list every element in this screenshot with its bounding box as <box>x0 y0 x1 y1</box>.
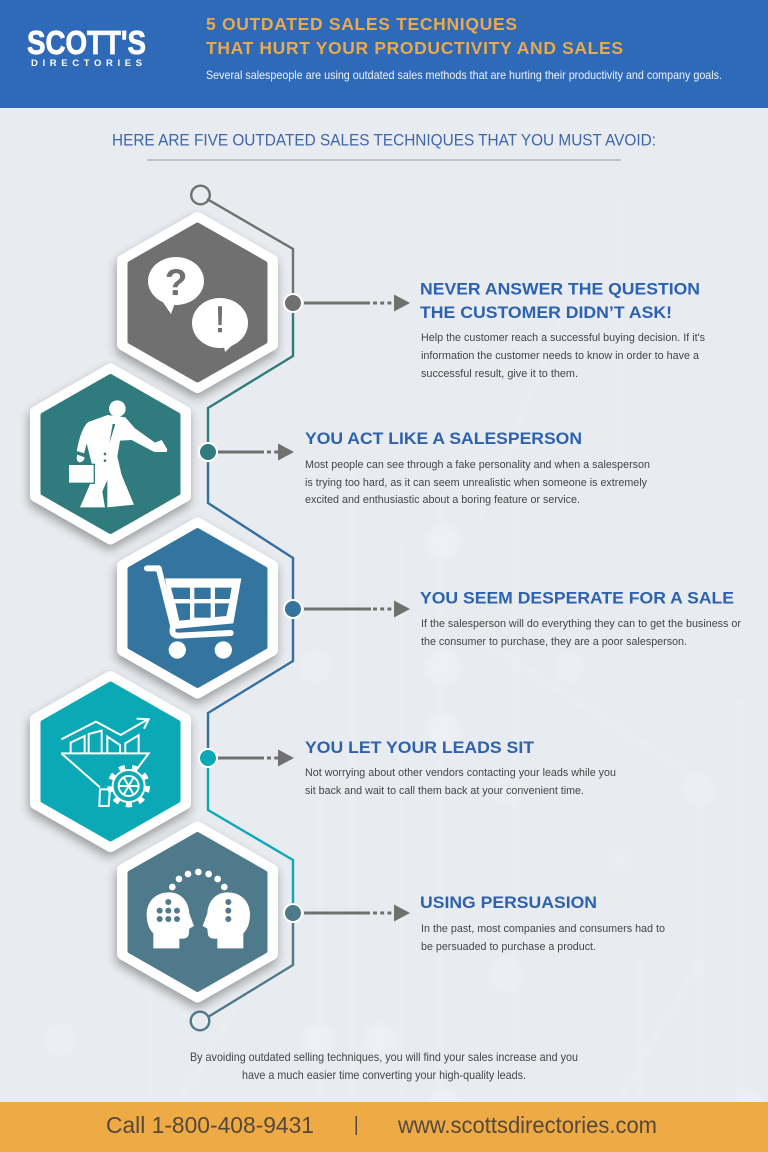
technique 3 text: If the salesperson will do everything they can to get the business or <box>421 618 741 630</box>
closing statement: By avoiding outdated selling techniques, you will find your sales increase and you <box>190 1050 578 1064</box>
technique 4 text: YOU LET YOUR LEADS SIT <box>305 738 535 757</box>
hexagon 5: two heads <box>122 828 272 1002</box>
icon: businessman <box>68 400 167 507</box>
hexagon 3: shopping cart <box>122 524 272 698</box>
node 4 with arrow <box>199 749 294 767</box>
node 3 with arrow <box>284 600 410 618</box>
technique 5 text <box>420 893 665 953</box>
technique 5 text: In the past, most companies and consumers had to <box>421 923 665 935</box>
arrow 5 <box>304 904 410 922</box>
subheading: HERE ARE FIVE OUTDATED SALES TECHNIQUES THAT YOU MUST AVOID: <box>112 130 656 150</box>
technique 1 text: NEVER ANSWER THE QUESTION <box>420 280 700 298</box>
technique 2 text: YOU ACT LIKE A SALESPERSON <box>305 429 582 448</box>
technique 5 text: be persuaded to purchase a product. <box>421 941 596 953</box>
arrow 2 <box>218 444 294 460</box>
title: 5 OUTDATED SALES TECHNIQUES <box>206 14 517 34</box>
technique 1 text <box>420 280 705 380</box>
separator <box>356 1116 357 1135</box>
icon: funnel with gear <box>61 719 149 806</box>
website: www.scottsdirectories.com <box>397 1112 657 1138</box>
end ring <box>191 1012 209 1030</box>
icon: speech bubbles: ? <box>165 262 187 303</box>
background circuit pattern <box>42 200 764 1121</box>
title <box>206 14 623 58</box>
technique 2 text: excited and enthusiastic about a boring feature or service. <box>305 494 580 506</box>
technique 1 text: information the customer needs to know in order to have a <box>421 350 700 362</box>
icon: cart <box>147 568 241 659</box>
technique 4 text <box>305 738 616 797</box>
icon: speech bubbles <box>148 257 248 352</box>
node 1 with arrow <box>284 294 410 312</box>
arrow 3 <box>304 600 410 618</box>
closing statement: have a much easier time converting your high-quality leads. <box>242 1068 526 1082</box>
arrow 4 <box>218 750 294 766</box>
technique 3 text: YOU SEEM DESPERATE FOR A SALE <box>420 588 734 608</box>
node 2 with arrow <box>199 443 294 461</box>
logo: DIRECTORIES <box>31 58 142 69</box>
technique 5 text: USING PERSUASION <box>420 893 597 912</box>
phone number: Call 1-800-408-9431 <box>106 1112 314 1138</box>
hexagon 2: salesperson <box>35 370 185 544</box>
node 5 with arrow <box>284 904 410 922</box>
icon: speech bubbles: ! <box>215 299 225 340</box>
technique 1 text: successful result, give it to them. <box>421 368 578 380</box>
start ring <box>191 186 210 204</box>
connector timeline <box>207 199 293 1017</box>
technique 2 text <box>305 429 650 506</box>
title: THAT HURT YOUR PRODUCTIVITY AND SALES <box>206 38 623 58</box>
intro text: Several salespeople are using outdated sales methods that are hurting their productivity and company goals. <box>206 68 722 82</box>
hexagon 1: question and exclamation bubbles <box>122 218 272 392</box>
technique 2 text: is trying too hard, as it can seem unrealistic when someone is extremely <box>305 477 647 489</box>
header band <box>0 0 768 108</box>
icon: heads with dots <box>147 869 250 948</box>
technique 1 text: Help the customer reach a successful buying decision. If it's <box>421 332 705 344</box>
technique 4 text: Not worrying about other vendors contacting your leads while you <box>305 767 616 779</box>
logo: SCOTT'S <box>27 24 146 61</box>
hexagon 4: sales funnel <box>35 677 185 851</box>
closing statement <box>190 1050 578 1082</box>
arrow 1 <box>304 294 410 312</box>
footer band <box>0 1102 768 1152</box>
technique 2 text: Most people can see through a fake personality and when a salesperson <box>305 459 650 471</box>
technique 1 text: THE CUSTOMER DIDN’T ASK! <box>420 303 672 322</box>
technique 4 text: sit back and wait to call them back at your convenient time. <box>305 785 584 797</box>
technique 3 text <box>420 588 741 648</box>
technique 3 text: the consumer to purchase, they are a poor salesperson. <box>421 636 687 648</box>
